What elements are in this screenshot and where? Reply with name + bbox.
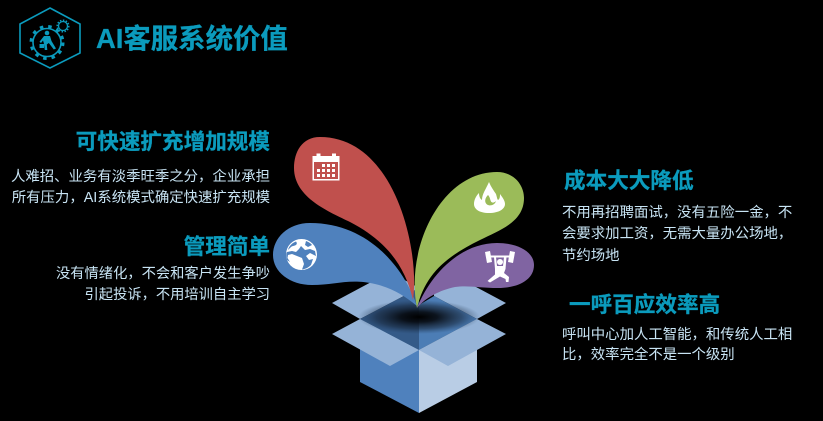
text block: scale: 人难招、业务有淡季旺季之分，企业承担 bbox=[11, 169, 270, 185]
petal: blue bbox=[273, 223, 417, 306]
text block: management: 引起投诉，不用培训自主学习 bbox=[85, 286, 270, 302]
text block: cost bbox=[562, 204, 792, 264]
box: front flaps bbox=[332, 319, 506, 366]
text block: efficiency: 呼叫中心加人工智能，和传统人工相 bbox=[562, 327, 792, 343]
heading: efficiency: 一呼百应效率高 bbox=[569, 292, 720, 317]
text block: management bbox=[56, 266, 270, 302]
box: inner opening bbox=[360, 288, 477, 350]
icon: weightlifter bbox=[485, 251, 515, 282]
text block: scale bbox=[11, 168, 270, 206]
heading: scale: 可快速扩充增加规模 bbox=[76, 129, 270, 154]
icon: calendar bbox=[312, 154, 340, 180]
icon: flame bbox=[474, 182, 505, 213]
petal: purple bbox=[417, 243, 534, 308]
title: AI客服系统价值 bbox=[96, 23, 288, 54]
icon: globe bbox=[286, 239, 317, 270]
text block: efficiency: 比，效率完全不是一个级别 bbox=[562, 347, 735, 363]
illustration: open box with petals bbox=[273, 137, 534, 413]
box: back flaps bbox=[332, 272, 506, 319]
heading: management: 管理简单 bbox=[184, 234, 270, 259]
box: opening shadow bbox=[358, 300, 480, 334]
text block: cost: 会要求加工资，无需大量办公场地， bbox=[562, 226, 792, 242]
petal: red bbox=[294, 137, 414, 300]
petal: green bbox=[415, 172, 524, 308]
text block: scale: 所有压力，AI系统模式确定快速扩充规模 bbox=[12, 190, 270, 206]
text block: cost: 不用再招聘面试，没有五险一金，不 bbox=[562, 204, 792, 220]
icon: hexagon gear logo bbox=[20, 8, 80, 68]
heading: cost: 成本大大降低 bbox=[564, 168, 694, 193]
text block: management: 没有情绪化，不会和客户发生争吵 bbox=[56, 266, 270, 282]
text block: cost: 节约场地 bbox=[562, 248, 620, 264]
box: front faces bbox=[360, 319, 477, 413]
text block: efficiency bbox=[562, 326, 792, 363]
